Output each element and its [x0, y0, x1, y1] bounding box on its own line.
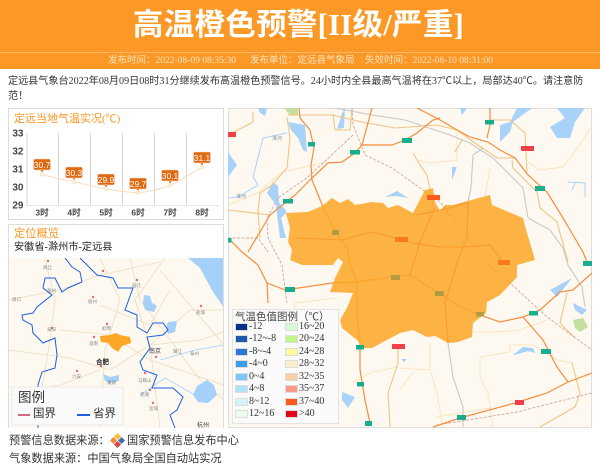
line chart: hourly temperature: 3时 — [35, 208, 49, 218]
line chart: hourly temperature — [12, 128, 219, 218]
legend swatches and labels: 28~32 — [299, 358, 324, 369]
issue info line: 发布时间：2022-08-09 08:35:30 — [108, 56, 236, 66]
line chart: hourly temperature: 6时 — [131, 208, 145, 218]
county internal roads — [297, 202, 503, 343]
legend swatches and labels: >40 — [299, 408, 315, 419]
line chart: hourly temperature: 29 — [12, 200, 24, 212]
legend swatches and labels: 8~12 — [249, 396, 269, 407]
location map: 盐城 — [196, 309, 205, 316]
warning description text: 定远县气象台2022年08月09日08时31分继续发布高温橙色预警信号。24小时内全县最高气温将在37℃以上，局部达40℃。请注意防范！ — [8, 76, 583, 102]
location map: 淮南 — [89, 340, 98, 347]
chart heading: 定远当地气温实况(℃) — [14, 113, 120, 125]
legend swatches and labels: -8~-4 — [249, 346, 271, 357]
title: 高温橙色预警[II级/严重] — [133, 8, 464, 42]
gray expressways — [335, 108, 585, 427]
location map: 芜湖 — [140, 391, 149, 398]
map legend: borders — [18, 390, 116, 420]
location map: 六安 — [72, 373, 81, 380]
location map: 宿迁 — [132, 282, 141, 289]
secondary roads — [228, 105, 580, 427]
provincial border key: 省界 — [93, 408, 116, 420]
line chart: hourly temperature: 4时 — [67, 208, 81, 218]
location map: 阜阳 — [47, 326, 56, 333]
location map: 泰州 — [190, 350, 199, 356]
location map: 巢湖 — [107, 379, 116, 386]
panel: temperature chart — [8, 108, 224, 220]
legend swatches and labels: -12 — [249, 321, 262, 332]
location map: 周口 — [12, 297, 21, 303]
line chart: hourly temperature: 8时 — [195, 208, 209, 218]
legend: temperature colour values — [232, 309, 339, 424]
header banner — [0, 0, 600, 69]
line chart: hourly temperature: 33 — [12, 128, 24, 140]
legend swatches and labels: 0~4 — [249, 371, 264, 382]
line chart: hourly temperature: 5时 — [99, 208, 113, 218]
map labels: 淮河 — [272, 135, 282, 142]
water bodies — [228, 108, 587, 408]
map labels: 淮河 — [236, 193, 246, 200]
location map: 宿州 — [88, 298, 97, 305]
legend swatches and labels: 20~24 — [299, 333, 324, 344]
legend swatches and labels: -12~-8 — [249, 333, 276, 344]
icon: warning centre logo — [110, 433, 125, 448]
warning data source: 预警信息数据来源： — [9, 435, 110, 447]
location map: 马鞍山 — [138, 377, 152, 384]
line chart: hourly temperature: 30.3 — [66, 168, 83, 178]
line chart: hourly temperature: 30.1 — [162, 171, 179, 181]
warning data source: 国家预警信息发布中心 — [127, 435, 239, 447]
minor roads — [228, 125, 592, 427]
issue info line — [0, 52, 600, 69]
legend title: 气温色值图例（℃） — [235, 312, 330, 323]
legend swatches and labels: 12~16 — [249, 408, 274, 419]
national border key: 国界 — [33, 408, 56, 420]
national highways — [230, 108, 592, 427]
location map: 合肥 — [96, 357, 110, 366]
route shields — [228, 120, 592, 426]
legend title: 图例 — [18, 390, 45, 405]
line chart: hourly temperature: 31.1 — [194, 153, 211, 163]
line chart: hourly temperature: 29.7 — [130, 179, 147, 189]
legend swatches and labels: -4~0 — [249, 358, 268, 369]
line chart: hourly temperature: 31 — [12, 164, 24, 176]
map labels — [236, 135, 282, 200]
green areas — [284, 108, 298, 115]
legend swatches and labels: 16~20 — [299, 321, 324, 332]
issue info line: 失效时间：2022-08-10 08:31:00 — [365, 56, 493, 66]
line chart: hourly temperature: 7时 — [163, 208, 177, 218]
location map: 商丘 — [43, 264, 52, 271]
location map: 南京 — [149, 347, 161, 355]
weather data source: 气象数据来源：中国气象局全国自动站实况 — [9, 453, 222, 465]
legend swatches and labels: 32~35 — [299, 371, 324, 382]
location map: 宣城 — [149, 405, 158, 412]
issue info line: 发布单位：定远县气象局 — [250, 56, 355, 66]
legend swatches and labels: 24~28 — [299, 346, 324, 357]
location map: 镇江 — [173, 348, 182, 355]
line chart: hourly temperature: 30.7 — [34, 160, 51, 170]
location path: 安徽省-滁州市-定远县 — [14, 242, 112, 253]
legend swatches and labels — [235, 321, 324, 419]
line chart: hourly temperature: 30 — [12, 182, 24, 194]
location map: 蚌埠 — [102, 325, 111, 332]
panel: county warning map — [228, 108, 592, 428]
line chart: hourly temperature: 32 — [12, 146, 24, 158]
line chart: hourly temperature: 29.9 — [98, 175, 115, 185]
legend swatches and labels: 4~8 — [249, 383, 264, 394]
location map — [9, 258, 223, 428]
warning data source — [9, 433, 239, 448]
location heading: 定位概览 — [14, 228, 59, 240]
panel: location overview — [8, 224, 224, 428]
location map: 亳州 — [47, 287, 56, 294]
county warning area — [286, 188, 535, 348]
railways — [228, 108, 592, 425]
legend swatches and labels: 37~40 — [299, 396, 324, 407]
legend swatches and labels: 35~37 — [299, 383, 324, 394]
